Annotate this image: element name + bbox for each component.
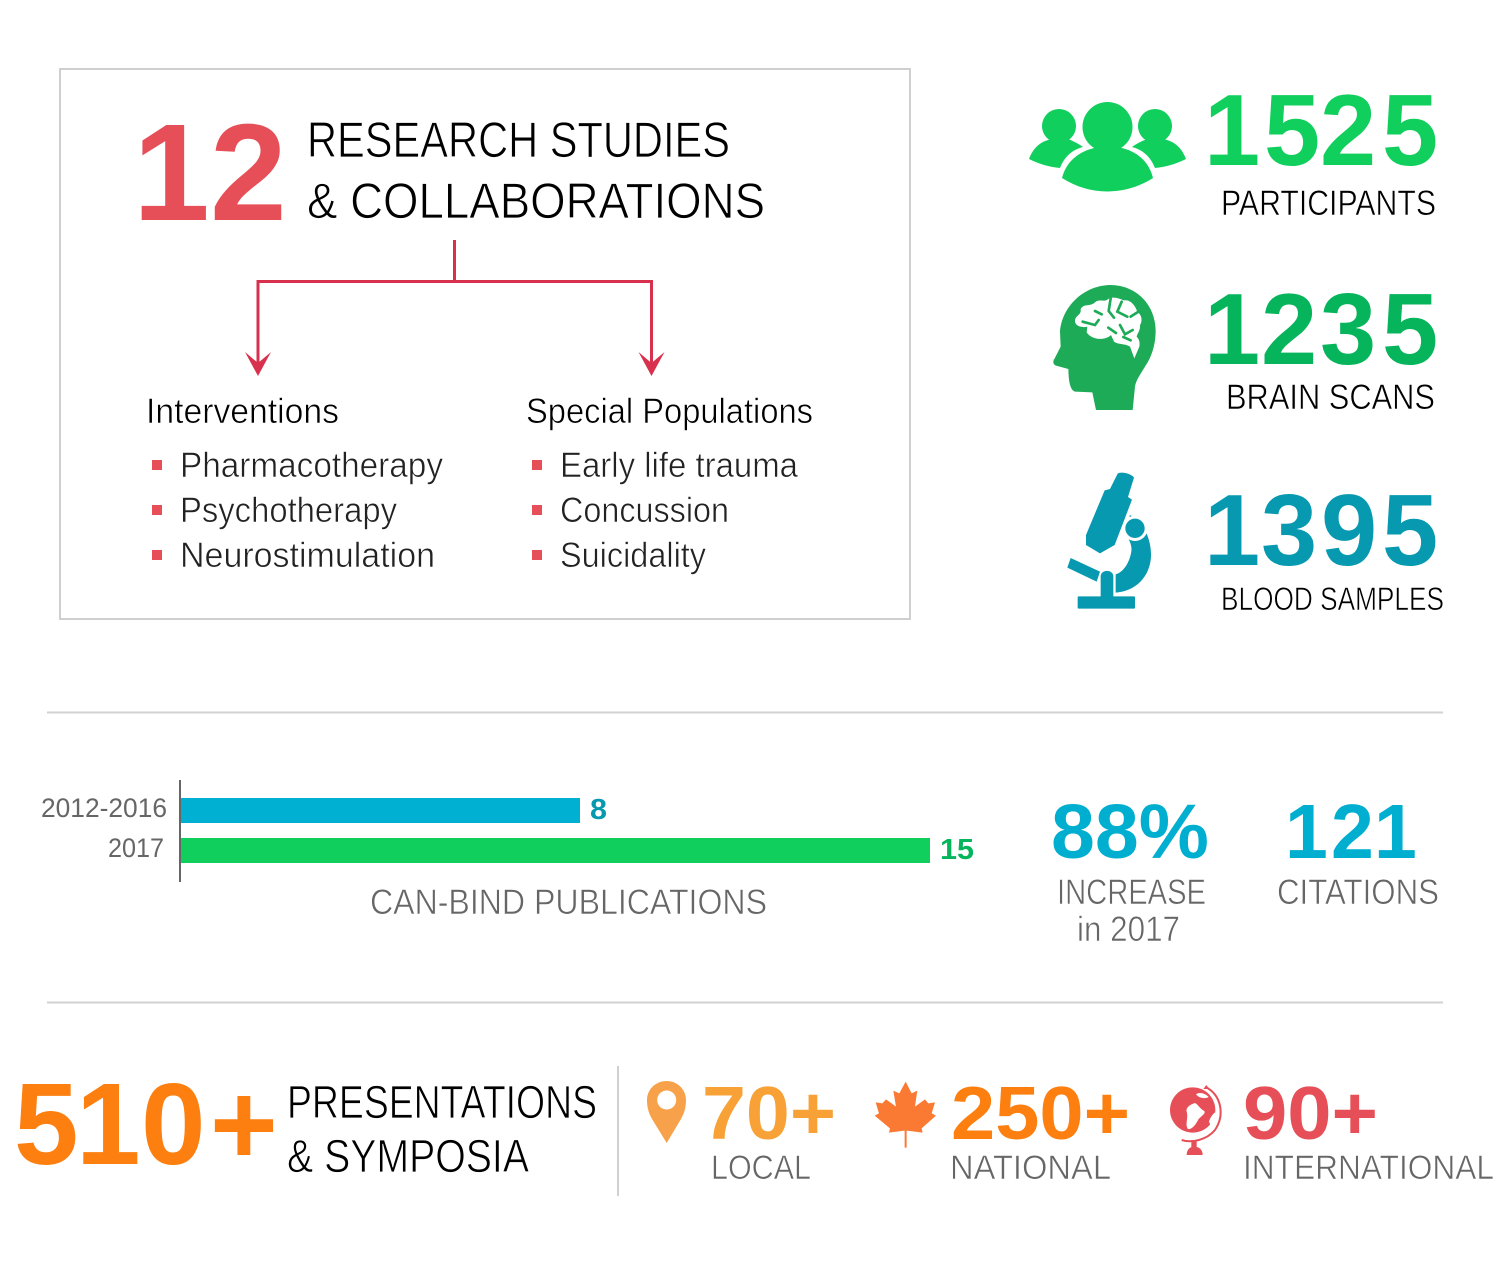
bar chart: CAN-BIND publications: 15 bbox=[940, 834, 974, 866]
stat: national: NATIONAL bbox=[950, 1149, 1111, 1187]
panel: research studies bbox=[60, 69, 910, 619]
stat: 510+ presentations: & SYMPOSIA bbox=[287, 1130, 529, 1182]
stat: 121 citations: 121 bbox=[1285, 789, 1417, 875]
list: special populations: Special Populations bbox=[526, 392, 813, 431]
heading: research studies and collaborations: & COLLABORATIONS bbox=[307, 173, 765, 229]
stat: blood samples bbox=[1067, 473, 1444, 617]
stat: international: 90+ bbox=[1243, 1071, 1378, 1155]
stat: 121 citations bbox=[1277, 789, 1439, 912]
stat: participants: 1525 bbox=[1204, 75, 1438, 187]
stat: 88% increase: in 2017 bbox=[1077, 910, 1180, 949]
stat: local: 70+ bbox=[702, 1071, 836, 1155]
stat: national: 250+ bbox=[951, 1071, 1130, 1155]
list: special populations bbox=[526, 392, 813, 575]
icon: head with brain bbox=[1053, 285, 1156, 410]
stat: 510+ presentations: 510+ bbox=[14, 1059, 278, 1189]
stat: 510+ presentations: PRESENTATIONS bbox=[287, 1076, 597, 1128]
list: special populations: Concussion bbox=[560, 491, 729, 530]
heading: research studies and collaborations: RESEARCH STUDIES bbox=[307, 112, 730, 168]
stat: 510+ presentations bbox=[14, 1059, 597, 1189]
stat: blood samples: BLOOD SAMPLES bbox=[1221, 581, 1444, 617]
list: interventions: Interventions bbox=[146, 392, 339, 431]
list: interventions bbox=[146, 392, 443, 575]
stat: participants bbox=[1029, 75, 1438, 223]
icon: people bbox=[1029, 102, 1186, 192]
stat: participants: PARTICIPANTS bbox=[1221, 184, 1436, 223]
icon: microscope bbox=[1067, 473, 1151, 609]
bar chart: CAN-BIND publications bbox=[41, 780, 974, 922]
icon: maple leaf bbox=[875, 1082, 936, 1148]
list: interventions: Psychotherapy bbox=[180, 491, 397, 530]
stat: local: LOCAL bbox=[711, 1149, 811, 1187]
bar chart: CAN-BIND publications: 2017 bbox=[108, 833, 164, 863]
bar chart: CAN-BIND publications: 2012-2016 bbox=[41, 793, 167, 823]
big number 12: 12 bbox=[133, 96, 287, 250]
stat: brain scans: BRAIN SCANS bbox=[1226, 378, 1435, 417]
icon: map pin bbox=[647, 1081, 686, 1143]
stat: national bbox=[875, 1071, 1130, 1187]
bar chart: CAN-BIND publications: 8 bbox=[590, 794, 607, 826]
list: interventions: Pharmacotherapy bbox=[180, 446, 443, 485]
list: interventions: Neurostimulation bbox=[180, 536, 435, 575]
list: special populations: Suicidality bbox=[560, 536, 706, 575]
arrows: branching tree bbox=[245, 240, 664, 376]
stat: 88% increase bbox=[1051, 789, 1209, 949]
stat: 88% increase: 88% bbox=[1051, 789, 1209, 875]
icon: globe bbox=[1170, 1085, 1221, 1155]
stat: local bbox=[647, 1071, 836, 1187]
list: special populations: Early life trauma bbox=[560, 446, 798, 485]
stat: brain scans: 1235 bbox=[1204, 274, 1438, 386]
stat: brain scans bbox=[1053, 274, 1438, 417]
stat: 121 citations: CITATIONS bbox=[1277, 873, 1439, 912]
heading: research studies and collaborations bbox=[307, 112, 765, 229]
stat: blood samples: 1395 bbox=[1204, 475, 1438, 587]
bar chart: CAN-BIND publications: CAN-BIND PUBLICATIONS bbox=[370, 883, 767, 922]
stat: 88% increase: INCREASE bbox=[1057, 873, 1206, 912]
stat: international bbox=[1170, 1071, 1494, 1187]
